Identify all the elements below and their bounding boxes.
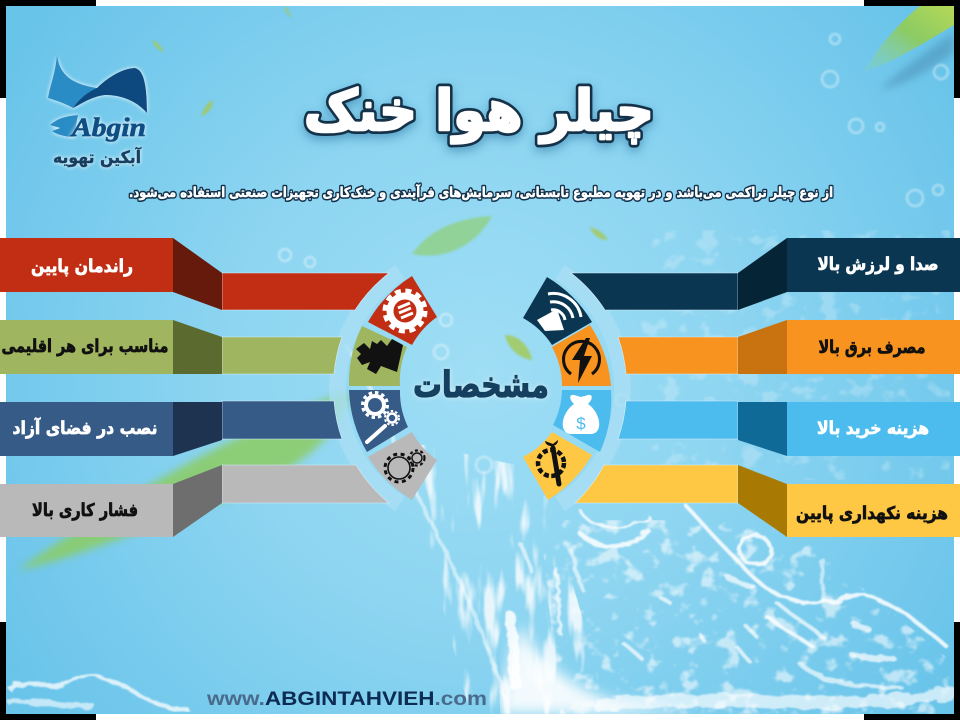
item: high noise and vibration: صدا و لرزش بالا <box>818 255 938 275</box>
item: outdoor installation: نصب در فضای آزاد <box>12 416 158 439</box>
item: high power use: مصرف برق بالا <box>818 338 926 358</box>
logo flames <box>50 115 78 137</box>
item: high noise and vibration <box>571 238 960 310</box>
segment: green puzzle <box>349 326 407 386</box>
intro paragraph: از نوع چیلر تراکمی می‌باشد و در تهویه مطبوع تابستانی، سرمایش‌های فرآیندی و خنک‌کاری تجهیزات صنعتی استفاده می‌شود. <box>129 184 833 201</box>
logo mark <box>48 55 147 113</box>
leaf: top right <box>863 6 954 90</box>
blotch texture: right side <box>640 230 950 480</box>
intro paragraph: از نوع چیلر تراکمی می‌باشد و در تهویه مطبوع تابستانی، سرمایش‌های فرآیندی و خنک‌کاری تجهیزات صنعتی استفاده می‌شود. <box>129 184 833 201</box>
item: low efficiency: راندمان پایین <box>31 257 133 277</box>
segment: sky money bag <box>553 390 611 452</box>
title: چیلر هوا خنک <box>304 79 654 144</box>
bubbles <box>279 34 948 473</box>
segment: grey gears <box>368 432 437 500</box>
item: suitable for any climate <box>0 320 342 374</box>
ring segments <box>349 276 611 500</box>
item: outdoor installation <box>0 401 342 456</box>
item: high purchase cost <box>618 401 960 456</box>
leaf: centre <box>412 216 492 256</box>
logo caption: آبکین تهویه <box>53 146 142 168</box>
left column <box>0 238 389 537</box>
centre heading: مشخصات <box>413 365 549 406</box>
centre ring band <box>338 272 622 504</box>
soft white foam <box>500 625 700 714</box>
segment: blue tools <box>349 390 408 452</box>
website address: www. ABGINTAHVIEH .com <box>206 689 487 710</box>
segment: yellow wrench gear <box>523 432 592 500</box>
segment: red gear <box>368 276 437 345</box>
title: چیلر هوا خنک <box>304 79 654 144</box>
right column <box>571 238 960 537</box>
item: high working pressure: فشار کاری بالا <box>32 501 138 521</box>
item: high power use <box>618 320 960 374</box>
segment: sky money bag: $ <box>576 414 586 433</box>
item: low efficiency <box>0 238 389 310</box>
item: low maintenance cost <box>575 465 960 537</box>
water outlines <box>12 345 950 712</box>
streak texture: central column <box>400 440 610 714</box>
water splash <box>12 230 950 714</box>
segment: navy speaker <box>523 277 592 345</box>
item: suitable for any climate: مناسب برای هر اقلیمی <box>2 337 168 357</box>
segment: orange bolt <box>552 325 611 386</box>
item: high purchase cost: هزینه خرید بالا <box>817 419 929 439</box>
blotch texture: lower right <box>540 520 950 714</box>
item: high working pressure <box>0 465 389 537</box>
logo <box>48 55 147 168</box>
leaf: small ones <box>152 6 608 360</box>
leaf: long soft leaf behind bars <box>18 392 346 570</box>
logo wordmark: Abgin <box>70 113 146 142</box>
